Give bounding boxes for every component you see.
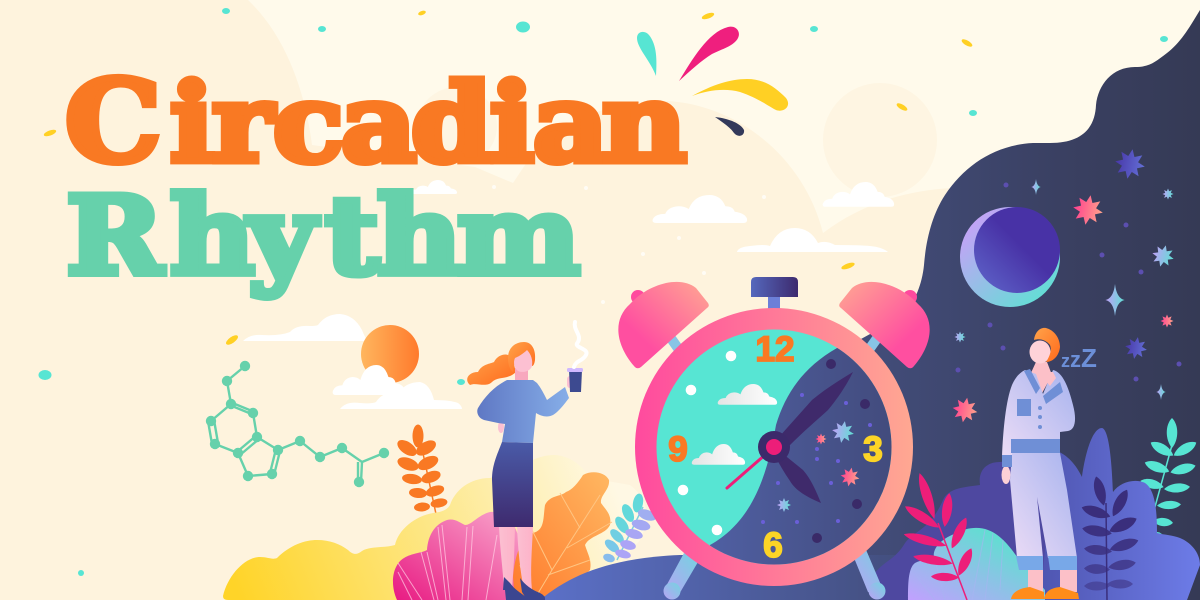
dial stars — [777, 419, 861, 512]
cloud: behind title — [410, 180, 457, 194]
head — [1030, 340, 1050, 364]
title line: Rhythm: Rhythm — [66, 172, 580, 299]
clock dial day side — [656, 330, 892, 564]
alarm clock — [618, 277, 950, 600]
steam — [574, 322, 587, 367]
orange leaf bush — [513, 472, 612, 600]
coffee cup — [567, 368, 583, 392]
sleeping man in pajamas — [1002, 328, 1097, 599]
numeral 9: 9 — [668, 430, 688, 469]
sun — [361, 325, 419, 383]
ground hill — [540, 555, 930, 600]
pale sun behind title — [417, 87, 497, 165]
face — [514, 350, 532, 372]
hair cap — [508, 342, 535, 372]
day dots — [678, 351, 736, 535]
hip hand — [498, 421, 504, 433]
pant cuffs — [1016, 556, 1077, 570]
navy fern — [1080, 475, 1140, 600]
cloud: upper right — [823, 182, 894, 207]
waist band and cuff — [1002, 439, 1060, 467]
title — [65, 57, 687, 299]
cloud: under sun — [340, 382, 462, 409]
clouds in sky — [243, 180, 894, 341]
pink fern — [902, 472, 976, 600]
clouds over sun — [333, 365, 462, 409]
left bell — [618, 282, 709, 368]
cloud: over sun — [333, 365, 405, 395]
clock legs — [664, 545, 886, 600]
neck — [1030, 362, 1052, 395]
legs — [499, 526, 533, 590]
collar and pocket — [1017, 369, 1063, 416]
front teal bush — [908, 528, 1045, 600]
molecule diagram — [206, 361, 389, 487]
numeral 12: 12 — [756, 330, 794, 369]
pink bush — [393, 512, 521, 600]
raised hand — [1045, 372, 1056, 386]
top button — [751, 277, 798, 310]
pale sun top right — [823, 83, 937, 197]
clock dial night side — [710, 348, 892, 564]
feet and shoes — [1011, 568, 1079, 599]
neck — [515, 368, 528, 383]
numeral 3: 3 — [863, 430, 883, 469]
pants — [1010, 452, 1077, 558]
teal fern — [1139, 418, 1199, 542]
cloud: wide center — [737, 228, 888, 252]
night dots — [761, 359, 872, 543]
blue top — [477, 380, 569, 443]
night sky blob — [800, 10, 1200, 600]
yellow bush — [223, 455, 647, 600]
title line: Circadian: ircadian — [170, 59, 687, 187]
skirt — [492, 442, 533, 527]
clock hands — [727, 372, 853, 503]
blue bush — [1040, 428, 1200, 600]
bell connectors — [666, 335, 882, 353]
lilac fern — [602, 493, 658, 564]
numeral 6: 6 — [763, 526, 783, 565]
buttons — [1038, 406, 1042, 429]
left hand — [1002, 466, 1010, 484]
clock body ring — [635, 308, 913, 586]
pajama shirt — [1002, 370, 1075, 457]
cloud: upper center — [653, 195, 747, 223]
title line: Circadian: C — [65, 57, 161, 188]
hair — [1034, 328, 1060, 362]
snore text: zzZ — [1061, 343, 1097, 373]
orange fern — [395, 424, 448, 514]
stars night sky — [951, 147, 1182, 424]
ponytail — [467, 355, 516, 385]
moon — [960, 207, 1060, 307]
heels — [503, 577, 545, 600]
purple back bush — [873, 455, 1090, 600]
sky light area — [248, 0, 1200, 233]
cloud: left wisp — [243, 314, 368, 341]
dial clouds — [692, 384, 777, 465]
woman with coffee — [467, 322, 587, 600]
right bell — [839, 282, 930, 368]
splash droplets — [637, 27, 788, 136]
